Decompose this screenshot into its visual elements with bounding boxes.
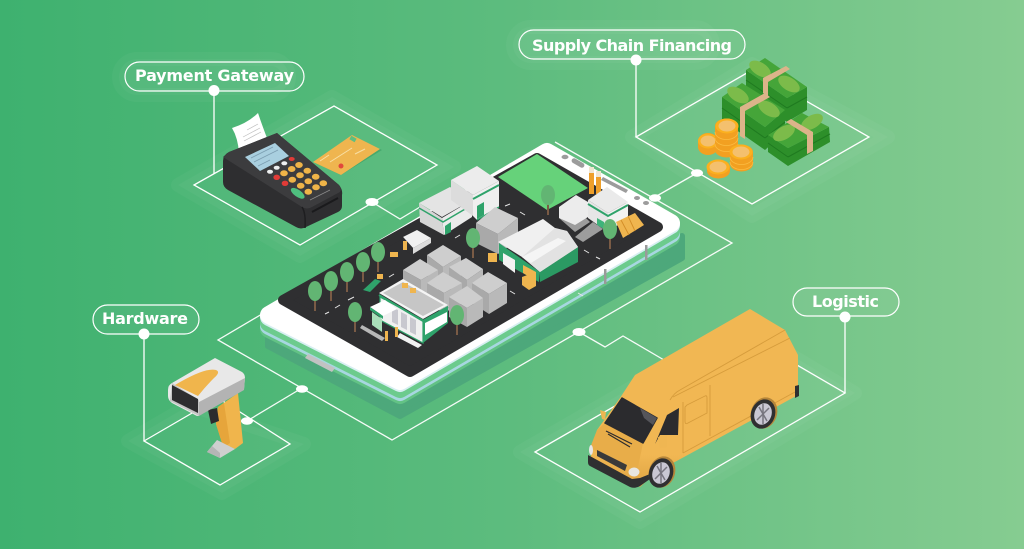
roof crease <box>670 330 795 453</box>
stairs <box>397 333 422 348</box>
panel: smartphone city <box>268 152 682 416</box>
label: Logistic <box>793 288 899 322</box>
wheels <box>644 453 680 491</box>
icon: credit card <box>313 135 382 175</box>
plate: supply chain financing <box>636 60 869 204</box>
plate: payment gateway <box>194 90 437 245</box>
trigger <box>208 408 219 424</box>
head <box>168 358 245 416</box>
phone details <box>305 155 649 372</box>
warehouse left <box>419 187 472 235</box>
trees <box>308 185 617 335</box>
wipers <box>606 431 632 447</box>
circuit outline around phone <box>218 142 732 440</box>
label: Logistic: Logistic <box>812 292 879 311</box>
mirror <box>600 410 606 420</box>
middle stack <box>722 83 785 150</box>
scanner window <box>172 385 198 413</box>
receipt paper <box>232 113 267 153</box>
plate: logistic <box>535 317 845 512</box>
connector nodes <box>241 169 703 425</box>
front hood <box>590 423 643 472</box>
number keys <box>280 162 327 195</box>
soft plate halos <box>119 27 888 522</box>
connector: hardware <box>247 388 302 421</box>
headlights <box>628 468 640 476</box>
awning <box>370 300 397 316</box>
icon: barcode scanner <box>168 358 245 458</box>
connector: supply chain to phone <box>655 173 697 197</box>
icon: delivery van <box>588 309 799 491</box>
coins <box>698 118 753 179</box>
screen <box>245 143 289 171</box>
road dashes <box>325 204 600 314</box>
phone shadow <box>268 236 682 416</box>
label: Payment Gateway <box>125 62 304 96</box>
windshield <box>605 398 657 443</box>
concrete blocks <box>403 207 518 327</box>
body <box>590 309 798 487</box>
small truck and workers <box>363 230 497 292</box>
label: Hardware: Hardware <box>102 309 188 328</box>
label: Hardware <box>93 305 199 340</box>
roof boxes and people <box>385 283 416 341</box>
icon: money stacks and coins <box>698 57 830 179</box>
red keys <box>273 157 295 186</box>
back stack <box>746 57 807 122</box>
label: Supply Chain Financing: Supply Chain Financing <box>532 36 732 55</box>
function keys <box>267 161 287 174</box>
label: Supply Chain Financing <box>519 30 745 66</box>
orange accent <box>175 370 218 396</box>
icon: payment terminal <box>223 113 342 228</box>
connector: payment <box>372 202 420 219</box>
green lot <box>498 154 588 210</box>
base <box>207 440 235 458</box>
terminal body <box>223 133 342 228</box>
grille and bumper <box>588 455 650 488</box>
plate: hardware <box>144 334 290 485</box>
green key <box>289 186 306 201</box>
hangar <box>498 219 578 290</box>
screen <box>283 158 658 372</box>
factory <box>559 167 644 242</box>
label: Payment Gateway: Payment Gateway <box>135 66 295 85</box>
phone body layers <box>269 152 671 395</box>
rear bumper <box>795 385 799 398</box>
side window <box>655 408 679 444</box>
shop roof <box>379 279 448 319</box>
warehouse right <box>451 166 499 220</box>
phone legs <box>604 245 648 284</box>
shop building <box>360 279 448 348</box>
shop left wall <box>380 297 423 343</box>
bench <box>360 325 385 341</box>
shop right wall <box>423 306 448 343</box>
front right stack <box>768 110 830 166</box>
handle <box>216 393 243 449</box>
connector: logistic <box>579 332 664 360</box>
